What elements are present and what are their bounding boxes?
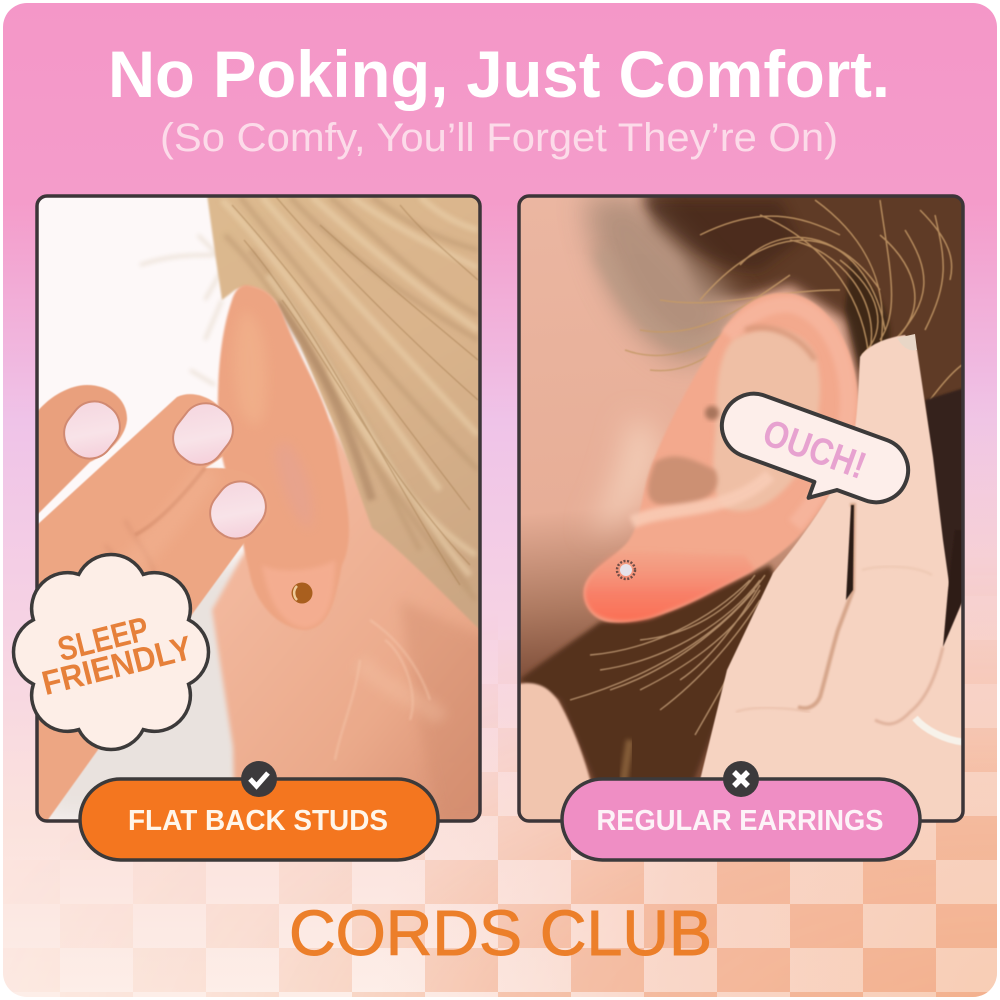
ear: [584, 293, 858, 622]
fingers two and three: [38, 394, 244, 820]
face skin: [520, 198, 860, 780]
brand name: CORDS CLUB: [289, 897, 712, 969]
ear: [218, 285, 349, 630]
panel: flat back studs photo: [37, 180, 500, 840]
ring: [915, 718, 963, 742]
badge text: [31, 601, 196, 703]
finger one: [37, 385, 127, 515]
stud: [292, 582, 312, 604]
neck: [210, 420, 478, 820]
photo background: [38, 198, 342, 819]
helix rim: [728, 305, 848, 525]
blonde hair: [206, 198, 478, 628]
label: regular earrings: REGULAR EARRINGS: [596, 805, 884, 837]
upper bowl: [713, 329, 820, 511]
title: No Poking, Just Comfort.: [108, 37, 890, 111]
antihelix: [632, 475, 770, 522]
right hand fingers: [519, 334, 963, 821]
dark gap between fingers: [798, 505, 854, 708]
concha shadow: [648, 457, 718, 505]
speech bubble: ouch: OUCH!: [757, 412, 871, 488]
left lower hand: [520, 682, 592, 820]
icon: cross: [723, 761, 759, 797]
badge text: SLEEP: [54, 610, 152, 669]
label: flat back studs: [80, 761, 438, 860]
hair under ear: [521, 563, 776, 778]
speech bubble: ouch: [707, 385, 917, 527]
hand: [37, 385, 276, 821]
subtitle: (So Comfy, You’ll Forget They’re On): [160, 116, 838, 160]
brown hair: [574, 198, 962, 585]
icon: check: [241, 761, 277, 797]
label: regular earrings: [562, 761, 920, 860]
nails: [63, 400, 121, 460]
red lobe: [584, 552, 755, 621]
panel: regular earrings photo: [517, 194, 965, 823]
badge text: FRIENDLY: [38, 629, 196, 703]
label: flat back studs: FLAT BACK STUDS: [128, 805, 388, 837]
wispy hair: [140, 235, 225, 385]
stud: [617, 561, 635, 579]
badge: sleep friendly: [13, 554, 209, 750]
